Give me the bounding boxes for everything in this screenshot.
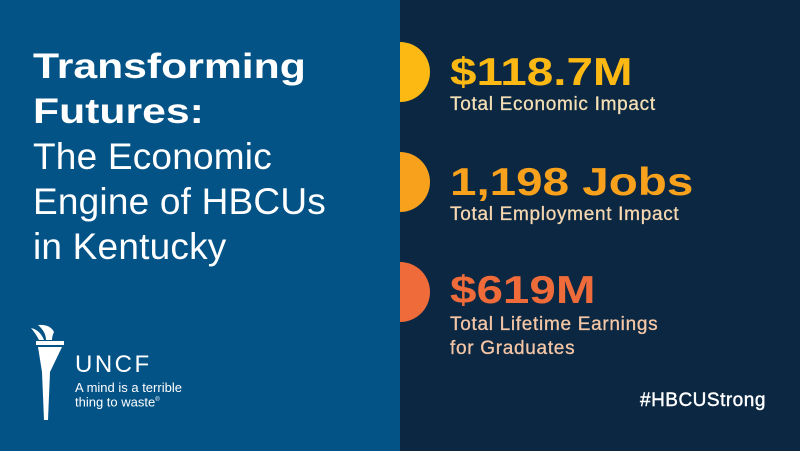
stat: lifetime earnings: for Graduates <box>450 338 575 359</box>
stat: lifetime earnings: $619M <box>450 269 595 312</box>
stat: employment: Total Employment Impact <box>450 204 679 225</box>
stat: economic impact: $118.7M <box>450 51 633 94</box>
title: Transforming <box>33 47 306 86</box>
icon: yellow semicircle <box>400 42 430 102</box>
icon: orange semicircle <box>400 152 430 212</box>
title: Futures: <box>33 92 204 131</box>
panel: left title area <box>0 0 400 451</box>
logo text: A mind is a terrible <box>75 380 182 395</box>
stat: lifetime earnings: Total Lifetime Earnings <box>450 314 658 335</box>
logo text: thing to waste® <box>75 394 160 409</box>
title: The Economic <box>33 136 272 177</box>
stat: lifetime earnings <box>400 262 658 359</box>
stat: economic impact: Total Economic Impact <box>450 94 656 115</box>
icon: coral semicircle <box>400 262 430 322</box>
title: Engine of HBCUs <box>33 181 326 222</box>
logo: UNCF <box>31 324 182 420</box>
stat: economic impact <box>400 42 656 115</box>
stat: employment <box>400 152 693 225</box>
stat: employment: 1,198 Jobs <box>450 161 693 204</box>
logo text: UNCF <box>75 351 152 378</box>
icon: torch <box>31 324 64 420</box>
hashtag: #HBCUStrong <box>640 390 766 411</box>
title <box>33 47 326 267</box>
title: in Kentucky <box>33 226 226 267</box>
logo text <box>75 351 182 409</box>
